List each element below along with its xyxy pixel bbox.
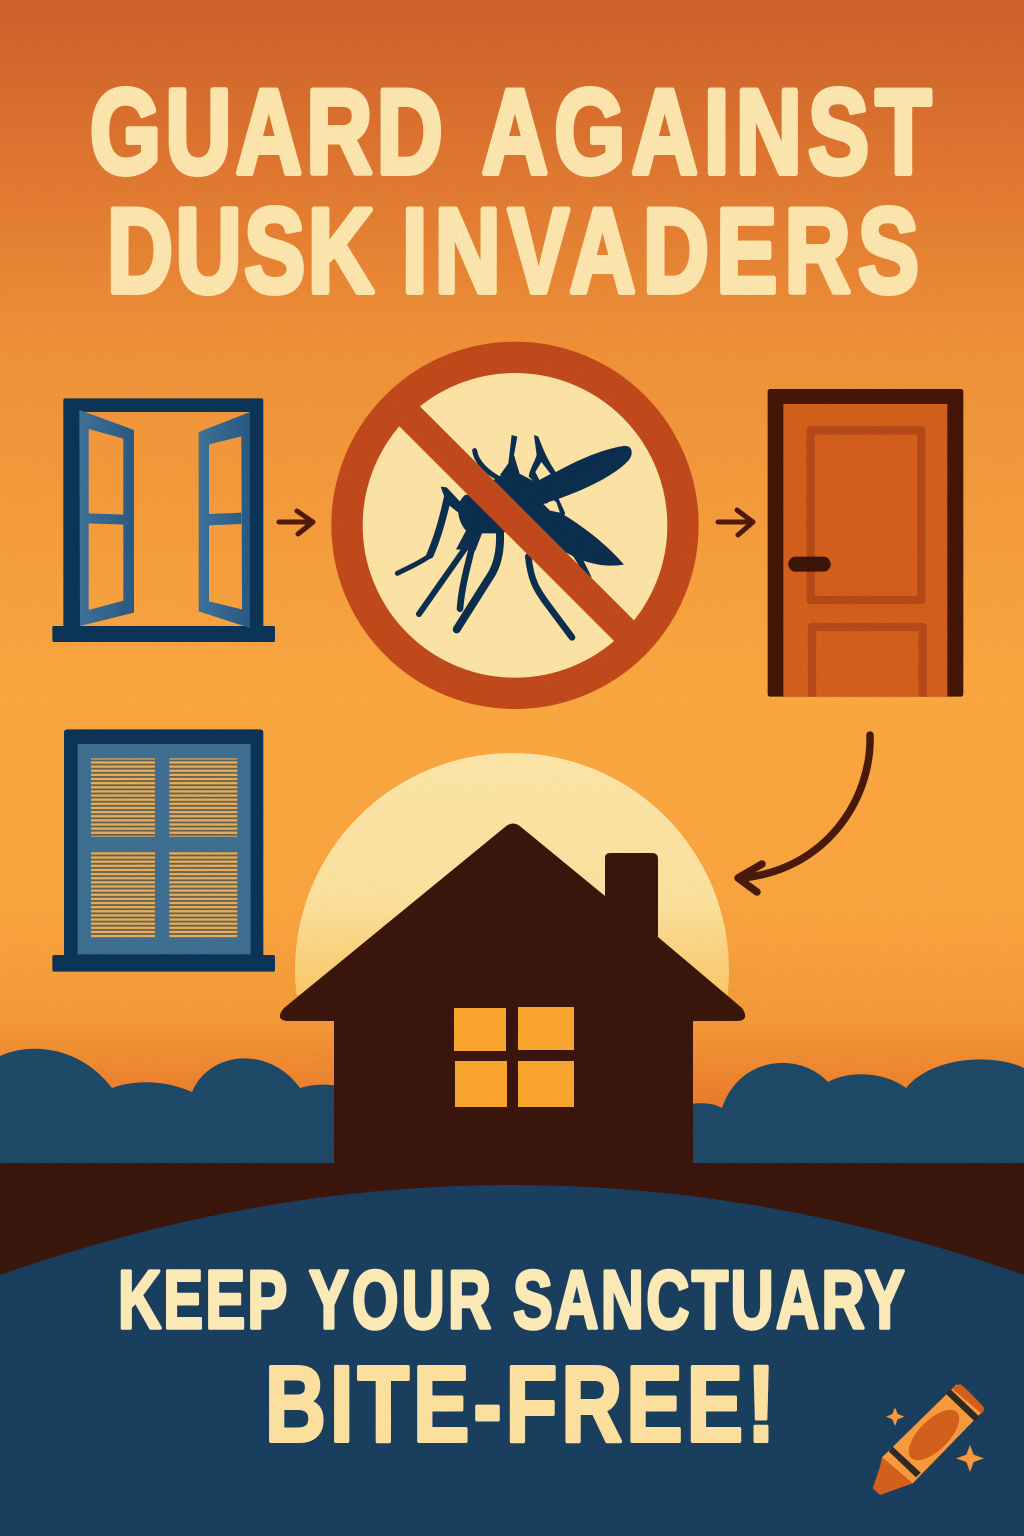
title: AGAINST	[482, 65, 931, 199]
bushes right	[690, 1059, 1024, 1170]
blue hill banner	[0, 1185, 1024, 1536]
icon: door	[768, 389, 963, 697]
arrow: window to mosquito	[279, 511, 313, 534]
slogan: BITE-FREE!	[265, 1343, 775, 1464]
bushes left	[0, 1049, 340, 1170]
icon: no mosquito sign	[347, 357, 683, 693]
title	[90, 65, 931, 318]
mosquito silhouette	[397, 435, 632, 637]
prohibition ring	[347, 357, 683, 693]
ground band	[0, 1163, 1024, 1303]
door frame	[768, 389, 963, 697]
slogan: SANCTUARY	[513, 1255, 905, 1346]
curved arrow to house	[738, 735, 870, 892]
lit house window	[454, 1007, 574, 1107]
slogan: KEEP	[118, 1255, 287, 1346]
door panels	[811, 430, 923, 697]
title: DUSK	[107, 184, 374, 318]
title: INVADERS	[402, 184, 919, 318]
house silhouette	[280, 824, 745, 1170]
slogan: YOUR	[309, 1255, 491, 1346]
icon: crayon with sparkles	[873, 1384, 984, 1495]
icon: open window	[52, 398, 275, 642]
mesh panes	[91, 758, 237, 937]
sun	[295, 753, 729, 995]
door handle	[788, 557, 831, 572]
prohibition bar	[397, 403, 635, 642]
door leaf	[783, 404, 947, 697]
icon: screened window	[52, 729, 275, 972]
title: GUARD	[90, 65, 443, 199]
sign background	[362, 372, 668, 679]
slogan	[118, 1255, 905, 1464]
arrow: mosquito to door	[718, 510, 753, 535]
